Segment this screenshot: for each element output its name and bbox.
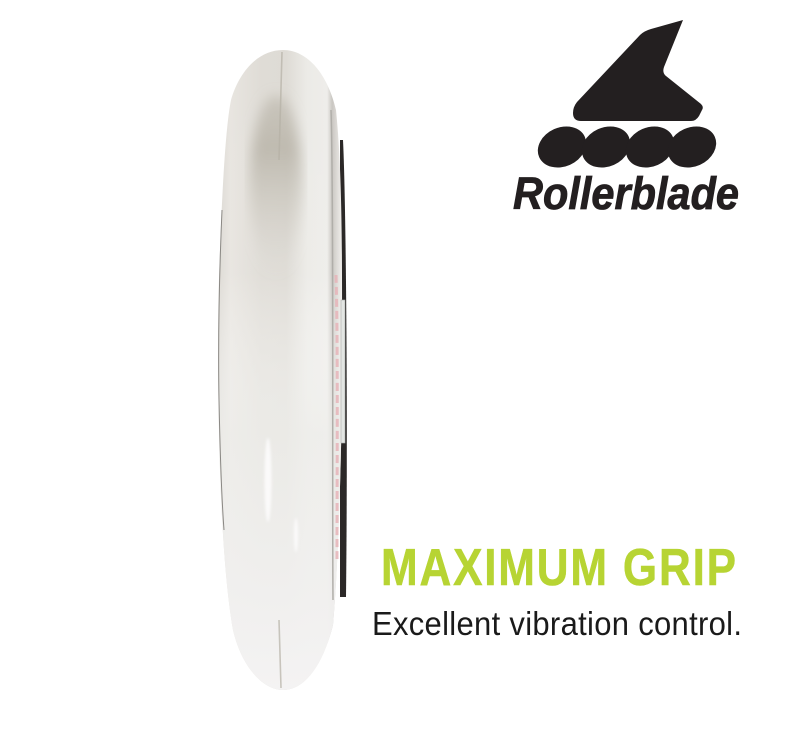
wheel: left edge line — [219, 210, 224, 530]
logo: skate boot blade — [573, 20, 703, 121]
Rollerblade logo — [513, 20, 739, 219]
wheel: pink print — [336, 275, 337, 560]
logo: four wheels — [531, 119, 723, 175]
wheel: dark hub edge — [340, 140, 347, 597]
wheel: highlights — [264, 438, 298, 552]
wheel seen edge-on — [218, 50, 347, 690]
wheel: lower fade — [218, 50, 342, 690]
wheel: centre seam — [279, 52, 282, 688]
wheel: body — [218, 50, 342, 690]
wheel: inner rim line — [331, 110, 333, 600]
heading: MAXIMUM GRIP — [381, 540, 736, 597]
wheel: upper shadow — [250, 95, 302, 275]
wheel: hub tab — [341, 300, 345, 443]
logo: wordmark: Rollerblade — [513, 168, 739, 219]
tagline: Excellent vibration control. — [372, 605, 742, 642]
